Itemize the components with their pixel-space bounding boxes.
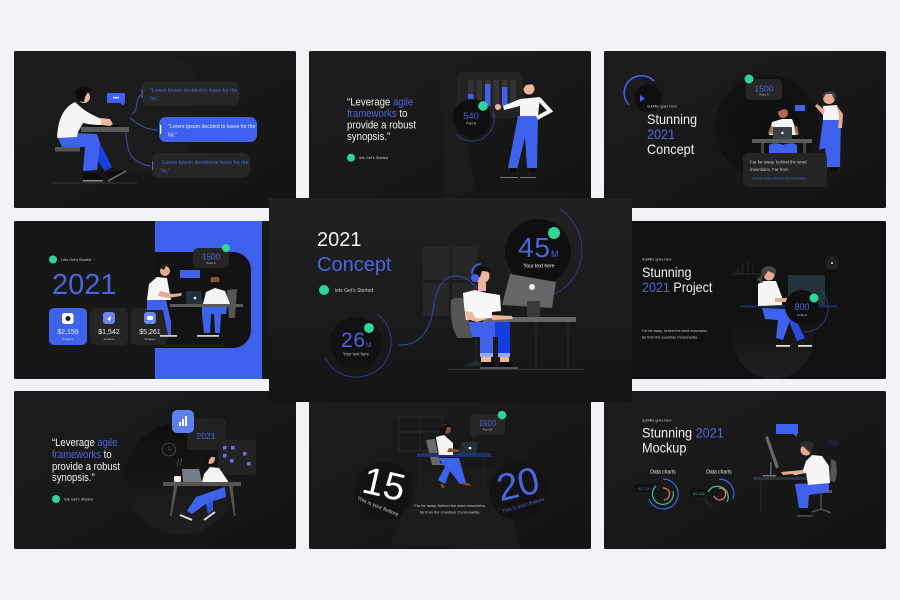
heading: Concept	[647, 142, 695, 157]
stat circle 45	[505, 209, 582, 299]
card 1500	[470, 411, 506, 438]
stat circle 45: Your text here	[524, 264, 555, 270]
heading	[642, 258, 713, 295]
card 1500: Point A	[206, 261, 216, 265]
heading: Stunning	[647, 112, 697, 127]
feature 15: 15	[358, 460, 409, 510]
card 1500: 1500	[755, 84, 774, 94]
donut chart 2	[690, 470, 734, 507]
stat circle 26: M	[366, 343, 371, 349]
heading: 2021	[317, 229, 362, 251]
finance card 3	[131, 308, 168, 345]
donut chart 1: Data charts	[650, 470, 676, 476]
card 1500: 1500	[479, 419, 497, 428]
illustration: seated woman with screen	[733, 256, 839, 347]
quote text: “Leverage agile	[52, 438, 118, 449]
panel: slide 3 stunning concept	[604, 51, 886, 208]
heading: Stunning	[642, 265, 691, 280]
text card: mountains. Far from	[750, 167, 789, 172]
illustration: person at desk: •••	[113, 96, 119, 102]
connector lines	[126, 95, 158, 166]
window	[423, 247, 477, 316]
stat circle 45: 45	[518, 232, 550, 263]
stat circle 800: 800	[794, 302, 810, 312]
donut chart 2: $1,542	[693, 492, 705, 496]
icon: clock	[162, 443, 176, 456]
year card: 2021	[197, 431, 216, 441]
text card: Far far away, behind the mountains	[752, 176, 807, 180]
panel: center slide 2021 concept	[269, 198, 632, 402]
heading	[647, 104, 697, 157]
speech bubble bottom: far.”	[161, 168, 170, 174]
dots card	[218, 440, 256, 475]
card 1500	[193, 244, 230, 268]
illustration: man with headset at monitor	[448, 264, 584, 370]
illustration: person at desk	[55, 87, 129, 182]
illustration: woman at laptop	[163, 453, 241, 520]
donut chart 1	[635, 470, 678, 509]
illustration: man with laptop and woman	[752, 91, 843, 171]
finance card 1	[49, 308, 87, 345]
panel: slide 9 mockup with data charts	[604, 391, 886, 549]
finance card 3: $5,261	[139, 329, 161, 336]
stat circle 800	[785, 290, 828, 332]
stat circle 800: Point A	[797, 313, 807, 317]
panel: slide 6 stunning project	[604, 221, 886, 379]
quote text: frameworks to	[52, 450, 112, 461]
heading: Subtitle goes here	[647, 104, 677, 108]
feature 20: This is your feature	[501, 497, 545, 515]
call to action	[49, 256, 91, 264]
donut chart 1: $2,159	[638, 487, 650, 491]
play icon	[624, 76, 662, 112]
card 1500: 1500	[202, 252, 220, 262]
panel: slide 2 quote	[309, 51, 591, 208]
card 1500: Point A	[483, 428, 492, 432]
donut chart 2: Data charts	[706, 470, 732, 476]
dark rounded inset	[155, 252, 251, 348]
paragraph: Far far away, behind the word mountains,	[642, 329, 708, 333]
stat circle 540	[453, 99, 494, 141]
blue side band	[155, 221, 262, 379]
icon: chart tile	[172, 410, 194, 433]
speech bubble top: “Lorem Ipsum decided to leave for the	[150, 88, 237, 94]
finance card 3: Finance	[145, 337, 156, 341]
stat circle 540: Point B	[466, 122, 476, 126]
bar chart	[457, 72, 523, 118]
speech bubble top	[142, 82, 239, 106]
paragraph: far from the countries Consonantia.	[420, 510, 480, 514]
year card	[187, 419, 226, 450]
call to action	[52, 495, 93, 503]
illustration: man at monitor	[753, 424, 839, 517]
finance card 2	[90, 308, 128, 345]
stat circle 26: 26	[341, 329, 365, 352]
call to action: Lets Get's Started	[61, 258, 91, 262]
quote text: provide a robust	[347, 120, 416, 132]
cable line	[398, 276, 477, 345]
quote text	[347, 97, 416, 143]
panel: slide 4 2021 finance	[14, 221, 296, 379]
heading: Subtitle goes here	[642, 258, 672, 262]
feature 20: 20	[493, 460, 544, 510]
big year: 2021	[52, 269, 117, 301]
quote text: synopsis.”	[52, 473, 95, 484]
stat circle 26	[325, 314, 391, 377]
heading: Stunning 2021	[642, 425, 724, 441]
speech bubble bottom	[152, 153, 250, 178]
text card	[743, 153, 827, 187]
speech bubble bottom: “Lorem Ipsum decided to leave for the	[161, 160, 248, 166]
stat circle 540: 540	[463, 111, 479, 122]
feature 15: This is your feature	[356, 496, 399, 518]
heading	[642, 418, 724, 456]
finance card 1: $2,159	[57, 329, 79, 336]
illustration: woman at navy desk	[417, 424, 491, 488]
heading	[317, 229, 392, 276]
quote text: provide a robust	[52, 462, 120, 473]
heading: Concept	[317, 254, 392, 276]
call to action	[319, 285, 373, 295]
window outline	[395, 417, 444, 451]
speech bubble top: far.”	[150, 96, 159, 102]
call to action: lets Get's Started	[335, 288, 373, 294]
call to action	[347, 154, 388, 162]
quote text	[52, 438, 120, 484]
paragraph: far from the countries Consonantia.	[642, 336, 698, 340]
card 1500: Point A	[759, 92, 769, 96]
heading: 2021 Project	[642, 280, 713, 295]
stat circle 45: M	[551, 249, 558, 259]
paragraph: Far far away, behind the word mountains,	[414, 503, 486, 508]
call to action: lets Get's Started	[359, 156, 388, 160]
illustration: presenting woman	[495, 80, 550, 178]
card 1500	[744, 74, 782, 100]
panel: slide 1 conversation	[14, 51, 296, 208]
heading: Mockup	[642, 440, 686, 456]
illustration: two people at a table	[147, 264, 243, 346]
finance card 1: Finance	[63, 337, 74, 341]
speech bubble highlighted: far.”	[168, 132, 177, 138]
call to action: lets Get's Started	[64, 498, 93, 502]
quote text: “Leverage agile	[347, 97, 414, 109]
text card: Far far away, behind the word	[750, 160, 807, 164]
speech bubble highlighted	[159, 117, 257, 142]
paragraph	[642, 329, 708, 340]
panel: slide 7 quote with laptop	[14, 391, 296, 549]
heading: Subtitle goes here	[642, 418, 672, 422]
speech bubble highlighted: “Lorem Ipsum decided to leave for the	[168, 124, 255, 130]
finance card 2: $1,542	[98, 329, 120, 336]
paragraph	[414, 503, 486, 514]
panel: slide 8 two features	[309, 391, 591, 549]
stat circle 26: Your text here	[343, 352, 370, 356]
heading: 2021	[647, 127, 675, 142]
quote text: frameworks to	[347, 109, 408, 120]
quote text: synopsis.”	[347, 132, 391, 143]
finance card 2: Finance	[104, 337, 115, 341]
